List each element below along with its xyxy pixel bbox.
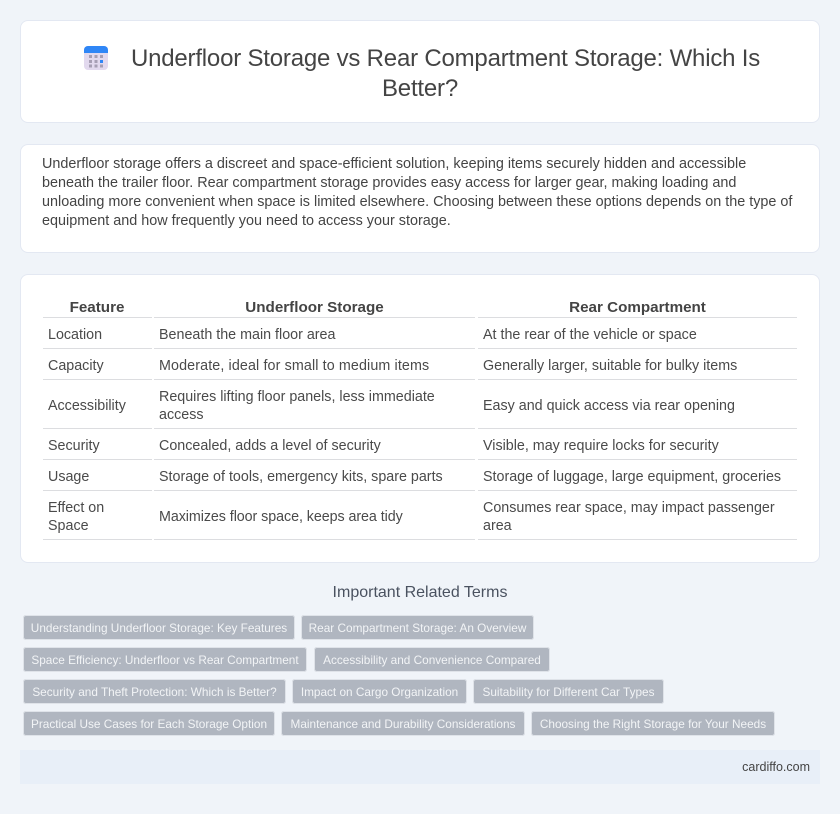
related term tags: Understanding Underfloor Storage: Key Features — [31, 621, 287, 635]
table header: Rear Compartment — [569, 299, 706, 316]
table rows: Space — [48, 518, 89, 534]
related term tags: Suitability for Different Car Types — [482, 685, 654, 699]
related term tags: Practical Use Cases for Each Storage Option — [31, 717, 267, 731]
table rows: area — [483, 518, 512, 534]
text block: introduction: unloading more convenient when space is limited elsewhere. Choosing between these options depends on the type of — [42, 194, 792, 210]
title: Better? — [382, 75, 458, 102]
table rows: Concealed, adds a level of security — [159, 438, 381, 454]
table rows: Maximizes floor space, keeps area tidy — [159, 509, 403, 525]
table rows: Consumes rear space, may impact passenger — [483, 500, 775, 516]
related term tags: Security and Theft Protection: Which is Better? — [32, 685, 277, 699]
table rows: Accessibility — [48, 398, 126, 414]
related term tags: Accessibility and Convenience Compared — [323, 653, 541, 667]
panel: introduction — [20, 144, 820, 253]
table header — [70, 299, 706, 316]
table rows: Location — [48, 327, 102, 343]
text block: introduction: Underfloor storage offers a discreet and space-efficient solution, keeping items securely hidden and accessible — [42, 156, 746, 172]
related term tags: Maintenance and Durability Considerations — [291, 717, 515, 731]
table rows: At the rear of the vehicle or space — [483, 327, 697, 343]
table rows: Visible, may require locks for security — [483, 438, 719, 454]
table rows: Easy and quick access via rear opening — [483, 398, 735, 414]
text block: introduction: equipment and how frequently you need to access your storage. — [42, 213, 451, 229]
table rows: Capacity — [48, 358, 104, 374]
text block: introduction: beneath the trailer floor. Rear compartment storage provides easy access for larger gear, making loading and — [42, 175, 736, 191]
footer: cardiffo.com — [742, 760, 810, 774]
panel: comparison table — [20, 274, 820, 563]
text block: introduction — [42, 156, 792, 229]
footer — [20, 750, 820, 784]
related term tags: Space Efficiency: Underfloor vs Rear Compartment — [31, 653, 299, 667]
table rows: Storage of tools, emergency kits, spare parts — [159, 469, 443, 485]
related term tags: Rear Compartment Storage: An Overview — [309, 621, 526, 635]
table rows: Moderate, ideal for small to medium items — [159, 358, 429, 374]
table header: Feature — [70, 299, 124, 316]
table rows: Storage of luggage, large equipment, groceries — [483, 469, 781, 485]
table rows: Beneath the main floor area — [159, 327, 335, 343]
related term tags: Impact on Cargo Organization — [301, 685, 458, 699]
table rows — [43, 317, 797, 540]
table rows: Generally larger, suitable for bulky items — [483, 358, 737, 374]
table rows: Security — [48, 438, 100, 454]
related term tags — [23, 615, 775, 736]
heading: important related terms: Important Related Terms — [333, 584, 507, 601]
table rows: Requires lifting floor panels, less immediate — [159, 389, 435, 405]
related term tags: Choosing the Right Storage for Your Needs — [540, 717, 766, 731]
title: Underfloor Storage vs Rear Compartment Storage: Which Is — [131, 45, 760, 72]
table header: Underfloor Storage — [245, 299, 384, 316]
table rows: Usage — [48, 469, 89, 485]
table rows: Effect on — [48, 500, 104, 516]
panel: title card — [20, 20, 820, 123]
table rows: access — [159, 407, 204, 423]
icon: calendar — [84, 46, 108, 70]
title — [131, 45, 760, 102]
